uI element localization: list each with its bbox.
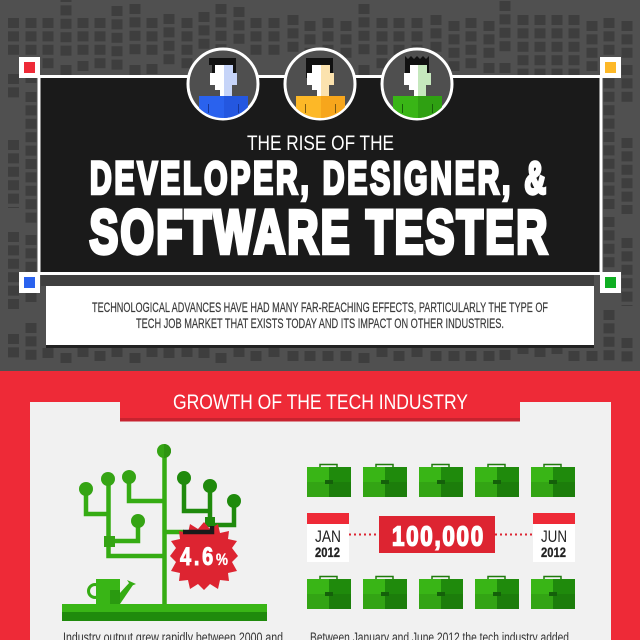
avatar: designer (yellow): [285, 49, 355, 120]
title kicker: THE RISE OF THE: [247, 132, 394, 155]
corner marker: blue: [19, 272, 40, 293]
dotted connector lines: [349, 534, 533, 536]
intro panel: [46, 286, 594, 348]
section heading ribbon: GROWTH OF THE TECH INDUSTRY: [173, 391, 468, 414]
calendar: jun 2012: JUN: [541, 527, 567, 546]
corner marker: yellow: [600, 57, 621, 78]
calendar: jan 2012: [307, 513, 349, 562]
tree illustration: [62, 444, 267, 621]
corner marker: red: [19, 57, 40, 78]
briefcases bottom row: [307, 576, 575, 609]
avatar: developer (blue): [188, 49, 258, 120]
section heading ribbon: [120, 371, 520, 422]
ground: [62, 604, 267, 621]
corner marker: green: [600, 272, 621, 293]
title line 1: DEVELOPER, DESIGNER, &: [90, 153, 546, 204]
badge: 4.6%: 4.6%: [180, 543, 228, 571]
section: growth of the tech industry: [0, 371, 640, 640]
left branches and trunk: [86, 451, 164, 604]
right branches: [184, 478, 234, 525]
watering can: [88, 579, 136, 604]
calendar: jan 2012: 2012: [315, 544, 340, 560]
avatar: software tester (green): [382, 49, 452, 120]
calendar: jun 2012: 2012: [541, 544, 566, 560]
stat box: 100,000: 100,000: [392, 521, 483, 552]
calendar: jan 2012: JAN: [315, 527, 341, 546]
background: skyline of dark squares: [14, 0, 627, 364]
stat box: 100,000: [379, 516, 495, 553]
frame shadow band: [41, 275, 594, 286]
calendar: jun 2012: [533, 513, 575, 562]
title line 2: SOFTWARE TESTER: [90, 198, 547, 267]
briefcases top row: [307, 464, 575, 497]
hero banner frame: [39, 76, 601, 274]
badge: 4.6%: [170, 522, 238, 590]
